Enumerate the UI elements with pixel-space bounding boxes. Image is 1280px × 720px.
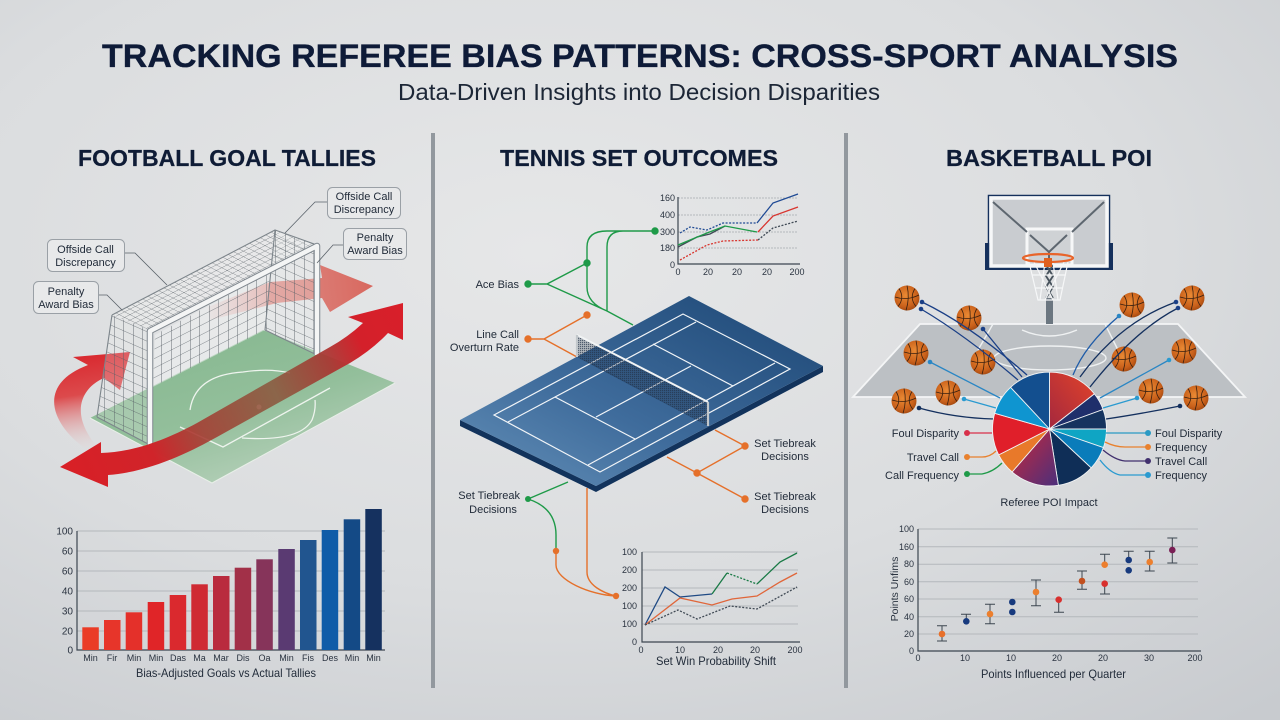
label: line call: Line Call bbox=[476, 329, 519, 341]
x axis label: Points Influenced per Quarter bbox=[981, 667, 1126, 681]
bar chart: Oa bbox=[258, 653, 271, 663]
line chart: top bbox=[660, 193, 805, 277]
subtitle: Data-Driven Insights into Decision Disparities bbox=[398, 79, 880, 105]
scatter chart: 10 bbox=[960, 653, 970, 663]
label: tiebreak right bottom bbox=[754, 491, 816, 516]
scatter chart: 30 bbox=[1144, 653, 1154, 663]
line chart: top: 0 bbox=[675, 267, 681, 277]
scatter chart: 0 bbox=[915, 653, 921, 663]
bar chart: 0 bbox=[67, 646, 73, 656]
line chart: bottom: 200 bbox=[787, 645, 803, 655]
heading: basketball: BASKETBALL POI bbox=[946, 145, 1152, 171]
title: TRACKING REFEREE BIAS PATTERNS: CROSS-SPORT ANALYSIS bbox=[102, 38, 1178, 74]
bar chart: Dis bbox=[236, 653, 250, 663]
line chart: bottom bbox=[622, 547, 803, 668]
panel: football bbox=[34, 145, 406, 680]
scatter chart bbox=[889, 524, 1203, 681]
line chart: top: 20 bbox=[732, 267, 742, 277]
tennis court bbox=[460, 296, 823, 492]
scatter chart: 0 bbox=[909, 646, 914, 656]
heading: tennis: TENNIS SET OUTCOMES bbox=[500, 145, 778, 171]
bar chart: Min bbox=[366, 653, 381, 663]
label: tiebreak right top: Decisions bbox=[761, 451, 809, 463]
line chart: bottom: 100 bbox=[622, 619, 637, 629]
label: ace bias: Ace Bias bbox=[476, 279, 519, 291]
line chart: top: 160 bbox=[660, 193, 675, 203]
scatter chart: 20 bbox=[1052, 653, 1062, 663]
scatter chart: 80 bbox=[904, 559, 914, 569]
bar chart: Min bbox=[279, 653, 294, 663]
pie labels right: Foul Disparity bbox=[1155, 428, 1223, 440]
line chart: top: 0 bbox=[670, 260, 675, 270]
basketballs bbox=[892, 286, 1208, 414]
scatter chart: 60 bbox=[904, 594, 914, 604]
scatter chart: 40 bbox=[904, 612, 914, 622]
chart title: win probability: Set Win Probability Shift bbox=[656, 654, 777, 668]
scatter chart: 160 bbox=[899, 542, 914, 552]
label: line call: Overturn Rate bbox=[450, 342, 519, 354]
goal illustration bbox=[54, 230, 403, 487]
line chart: bottom: 20 bbox=[713, 645, 723, 655]
scatter chart: 200 bbox=[1187, 653, 1203, 663]
pie chart: referee POI impact bbox=[992, 372, 1107, 486]
bar chart: 40 bbox=[62, 586, 73, 598]
line chart: bottom: 100 bbox=[622, 601, 637, 611]
pie labels left: Travel Call bbox=[907, 452, 959, 464]
heading: football: FOOTBALL GOAL TALLIES bbox=[78, 145, 376, 171]
ball connectors bbox=[917, 300, 1182, 419]
line chart: bottom: 200 bbox=[622, 565, 637, 575]
arrow: large red bias arrow bbox=[60, 303, 403, 487]
goal net bbox=[97, 230, 317, 445]
scatter chart: 20 bbox=[904, 629, 914, 639]
orange connectors: tiebreak right bbox=[667, 430, 748, 502]
arrow: left curved bbox=[54, 352, 130, 449]
bar chart: Min bbox=[149, 653, 163, 663]
bar chart: Fis bbox=[302, 653, 314, 663]
callout: penalty right: Award Bias bbox=[347, 245, 403, 257]
court floor bbox=[853, 324, 1245, 397]
pie caption: Referee POI Impact bbox=[1000, 497, 1098, 509]
line chart: top: 180 bbox=[660, 243, 675, 253]
tennis net bbox=[577, 335, 716, 430]
callout: offside right: Discrepancy bbox=[334, 204, 395, 216]
callout: penalty left: Award Bias bbox=[38, 299, 94, 311]
connectors: tiebreak left to chart bbox=[525, 482, 619, 599]
bar chart: Min bbox=[345, 653, 359, 663]
callout: penalty left bbox=[34, 282, 122, 314]
bar chart bbox=[56, 509, 385, 680]
panel: tennis bbox=[450, 145, 823, 668]
panel: basketball bbox=[853, 145, 1245, 681]
pie labels right bbox=[1155, 428, 1223, 482]
scatter chart: 20 bbox=[1098, 653, 1108, 663]
pie labels left: Foul Disparity bbox=[892, 428, 959, 440]
line chart: top: 20 bbox=[703, 267, 713, 277]
callout: offside right: Offside Call bbox=[336, 191, 392, 203]
callout: offside right bbox=[285, 188, 400, 233]
callout: penalty right bbox=[317, 228, 406, 263]
label: line call bbox=[450, 329, 519, 354]
bar chart: 60 bbox=[62, 546, 73, 558]
pie label connectors bbox=[964, 430, 1151, 478]
bar chart: Min bbox=[83, 653, 98, 663]
green connectors: ace bias bbox=[525, 228, 658, 325]
line chart: top: 200 bbox=[789, 267, 805, 277]
label: tiebreak right bottom: Decisions bbox=[761, 504, 809, 516]
bar chart: Min bbox=[127, 653, 141, 663]
bar chart: 60 bbox=[62, 566, 73, 578]
y axis label: Points Unfims bbox=[889, 557, 901, 621]
goal frame bbox=[150, 246, 317, 445]
pitch bbox=[90, 330, 395, 483]
callout: penalty left: Penalty bbox=[48, 286, 85, 298]
chart title: goals: Bias-Adjusted Goals vs Actual Tallies bbox=[136, 666, 316, 680]
bar chart: Ma bbox=[193, 653, 206, 663]
callout: offside left: Offside Call bbox=[57, 244, 114, 256]
line chart: top: 400 bbox=[660, 210, 675, 220]
bar chart: Das bbox=[170, 653, 186, 663]
pie labels left bbox=[885, 428, 959, 482]
line chart: top: 20 bbox=[762, 267, 772, 277]
line chart: bottom: 10 bbox=[675, 645, 685, 655]
callout: offside left bbox=[48, 240, 167, 285]
scatter chart: 100 bbox=[899, 524, 914, 534]
bar chart: Mar bbox=[213, 653, 229, 663]
label: tiebreak left: Decisions bbox=[469, 504, 517, 516]
pie labels right: Frequency bbox=[1155, 442, 1207, 454]
line chart: bottom: 200 bbox=[622, 583, 637, 593]
label: tiebreak left: Set Tiebreak bbox=[458, 490, 520, 502]
bar chart: 20 bbox=[62, 626, 73, 638]
line chart: bottom: 20 bbox=[750, 645, 760, 655]
scatter chart: 60 bbox=[904, 577, 914, 587]
line chart: bottom: 100 bbox=[622, 547, 637, 557]
pie labels right: Travel Call bbox=[1155, 456, 1207, 468]
bar chart: 100 bbox=[56, 526, 73, 538]
scatter chart: 10 bbox=[1006, 653, 1016, 663]
bar chart: 30 bbox=[62, 606, 73, 618]
pie labels left: Call Frequency bbox=[885, 470, 959, 482]
pie labels right: Frequency bbox=[1155, 470, 1207, 482]
arrow: pale red bbox=[208, 265, 373, 320]
bar chart: Des bbox=[322, 653, 338, 663]
callout: offside left: Discrepancy bbox=[55, 257, 116, 269]
line chart: bottom: 0 bbox=[638, 645, 644, 655]
label: tiebreak right top: Set Tiebreak bbox=[754, 438, 816, 450]
line chart: top: 300 bbox=[660, 227, 675, 237]
line chart: bottom: 0 bbox=[632, 637, 637, 647]
bar chart: Fir bbox=[107, 653, 117, 663]
callout: penalty right: Penalty bbox=[357, 232, 394, 244]
label: tiebreak right top bbox=[754, 438, 816, 463]
label: tiebreak right bottom: Set Tiebreak bbox=[754, 491, 816, 503]
orange connectors: line call bbox=[525, 312, 590, 357]
label: tiebreak left bbox=[458, 490, 520, 516]
hoop and backboard bbox=[985, 196, 1113, 324]
